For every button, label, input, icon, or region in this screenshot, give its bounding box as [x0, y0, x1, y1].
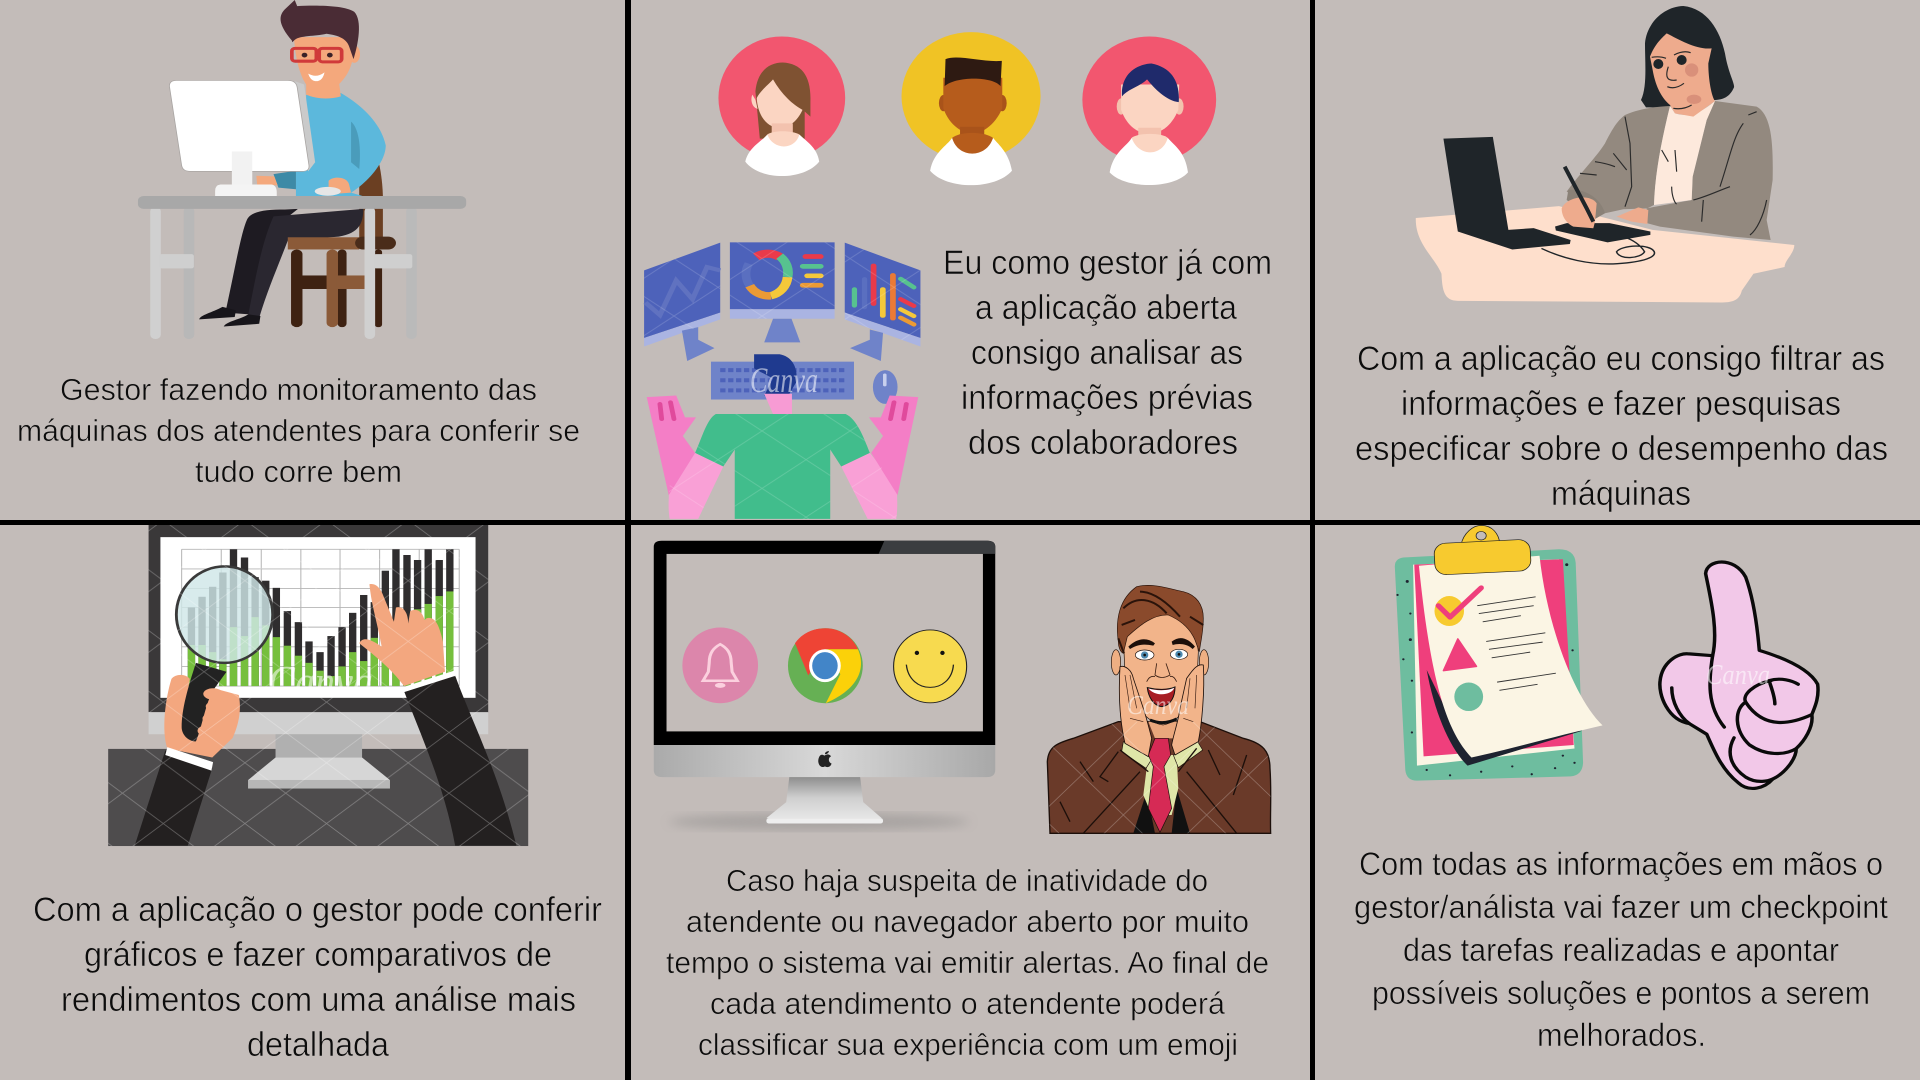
- text: analisar colaboradores: a aplicação aberta: [975, 289, 1237, 327]
- text: gestor monitoring: Gestor fazendo monitoramento das: [60, 372, 537, 407]
- illustration: table with laptop and tablet: [1416, 137, 1794, 303]
- text: analisar colaboradores: consigo analisar as: [971, 334, 1243, 372]
- watermark: Canva: Canva: [1127, 690, 1189, 720]
- icon: magnifying glass in hand: [135, 566, 273, 846]
- text: checkpoint: Com todas as informações em mãos o: [1359, 846, 1883, 882]
- panel: analisar colaboradores: [632, 0, 1310, 522]
- icon: avatar woman: [718, 37, 845, 176]
- text: alertas e emoji: Caso haja suspeita de inatividade do: [726, 863, 1208, 898]
- illustration: person with three monitors: [644, 242, 920, 519]
- icon: bell: [682, 627, 758, 703]
- icon: smiley emoji: [894, 630, 967, 703]
- panel: filtrar informacoes: [1314, 0, 1920, 522]
- text: checkpoint: gestor/análista vai fazer um checkpoint: [1354, 889, 1888, 925]
- text: checkpoint: possíveis soluções e pontos a serem: [1372, 975, 1870, 1011]
- text: alertas e emoji: cada atendimento o atendente poderá: [710, 986, 1226, 1021]
- panel: gestor monitoring: [0, 0, 628, 522]
- text: gestor monitoring: [17, 372, 580, 489]
- watermark: Canva: Canva: [1706, 660, 1770, 691]
- icon: thumbs up: [1660, 562, 1818, 788]
- illustration: monitor with chart and magnifier: [108, 525, 528, 846]
- panel: checkpoint: [1314, 525, 1920, 1080]
- text: filtrar informacoes: [1355, 340, 1888, 513]
- illustration: woman writing on tablet: [1562, 6, 1773, 240]
- icon: apple logo: [818, 751, 832, 767]
- text: checkpoint: das tarefas realizadas e apontar: [1403, 932, 1839, 968]
- text: graficos comparativos: detalhada: [247, 1026, 389, 1064]
- text: gestor monitoring: máquinas dos atendentes para conferir se: [17, 413, 580, 448]
- text: graficos comparativos: rendimentos com uma análise mais: [61, 981, 576, 1019]
- illustration: desktop computer: [654, 541, 995, 830]
- text: filtrar informacoes: especificar sobre o desempenho das: [1355, 430, 1888, 468]
- panel: graficos comparativos: [0, 525, 628, 1080]
- chart: bars over grid: [182, 549, 459, 686]
- text: checkpoint: melhorados.: [1537, 1017, 1706, 1053]
- text: analisar colaboradores: informações prévias: [961, 379, 1253, 417]
- icon: chrome logo: [788, 628, 863, 703]
- text: alertas e emoji: tempo o sistema vai emitir alertas. Ao final de: [666, 945, 1269, 980]
- text: analisar colaboradores: dos colaboradores: [968, 424, 1238, 462]
- text: alertas e emoji: classificar sua experiência com um emoji: [698, 1027, 1238, 1062]
- panel: alertas e emoji: [632, 526, 1310, 1080]
- icon: avatar man yellow: [902, 32, 1041, 185]
- text: analisar colaboradores: Eu como gestor já com: [943, 244, 1272, 282]
- text: graficos comparativos: Com a aplicação o gestor pode conferir: [33, 891, 602, 929]
- icon: clipboard: [1395, 525, 1603, 781]
- text: graficos comparativos: [33, 891, 602, 1064]
- text: filtrar informacoes: máquinas: [1551, 475, 1691, 513]
- text: analisar colaboradores: [943, 244, 1272, 462]
- text: checkpoint: [1354, 846, 1888, 1053]
- text: alertas e emoji: atendente ou navegador aberto por muito: [686, 904, 1249, 939]
- illustration: checklist clipboard and thumb: [1395, 525, 1818, 788]
- text: graficos comparativos: gráficos e fazer comparativos de: [84, 936, 552, 974]
- icon: avatar person navy hair: [1082, 37, 1216, 185]
- text: filtrar informacoes: Com a aplicação eu consigo filtrar as: [1357, 340, 1885, 378]
- illustration: surprised man: [1047, 585, 1271, 833]
- illustration: avatars and dashboards: [644, 32, 1216, 519]
- text: filtrar informacoes: informações e fazer pesquisas: [1401, 385, 1841, 423]
- text: gestor monitoring: tudo corre bem: [195, 454, 402, 489]
- text: alertas e emoji: [666, 863, 1269, 1062]
- watermark: Canva: Canva: [268, 656, 373, 707]
- icon: pointing hand in suit: [359, 584, 516, 846]
- illustration: man at desk with computer: [138, 0, 466, 339]
- watermark: Canva: Canva: [750, 360, 818, 400]
